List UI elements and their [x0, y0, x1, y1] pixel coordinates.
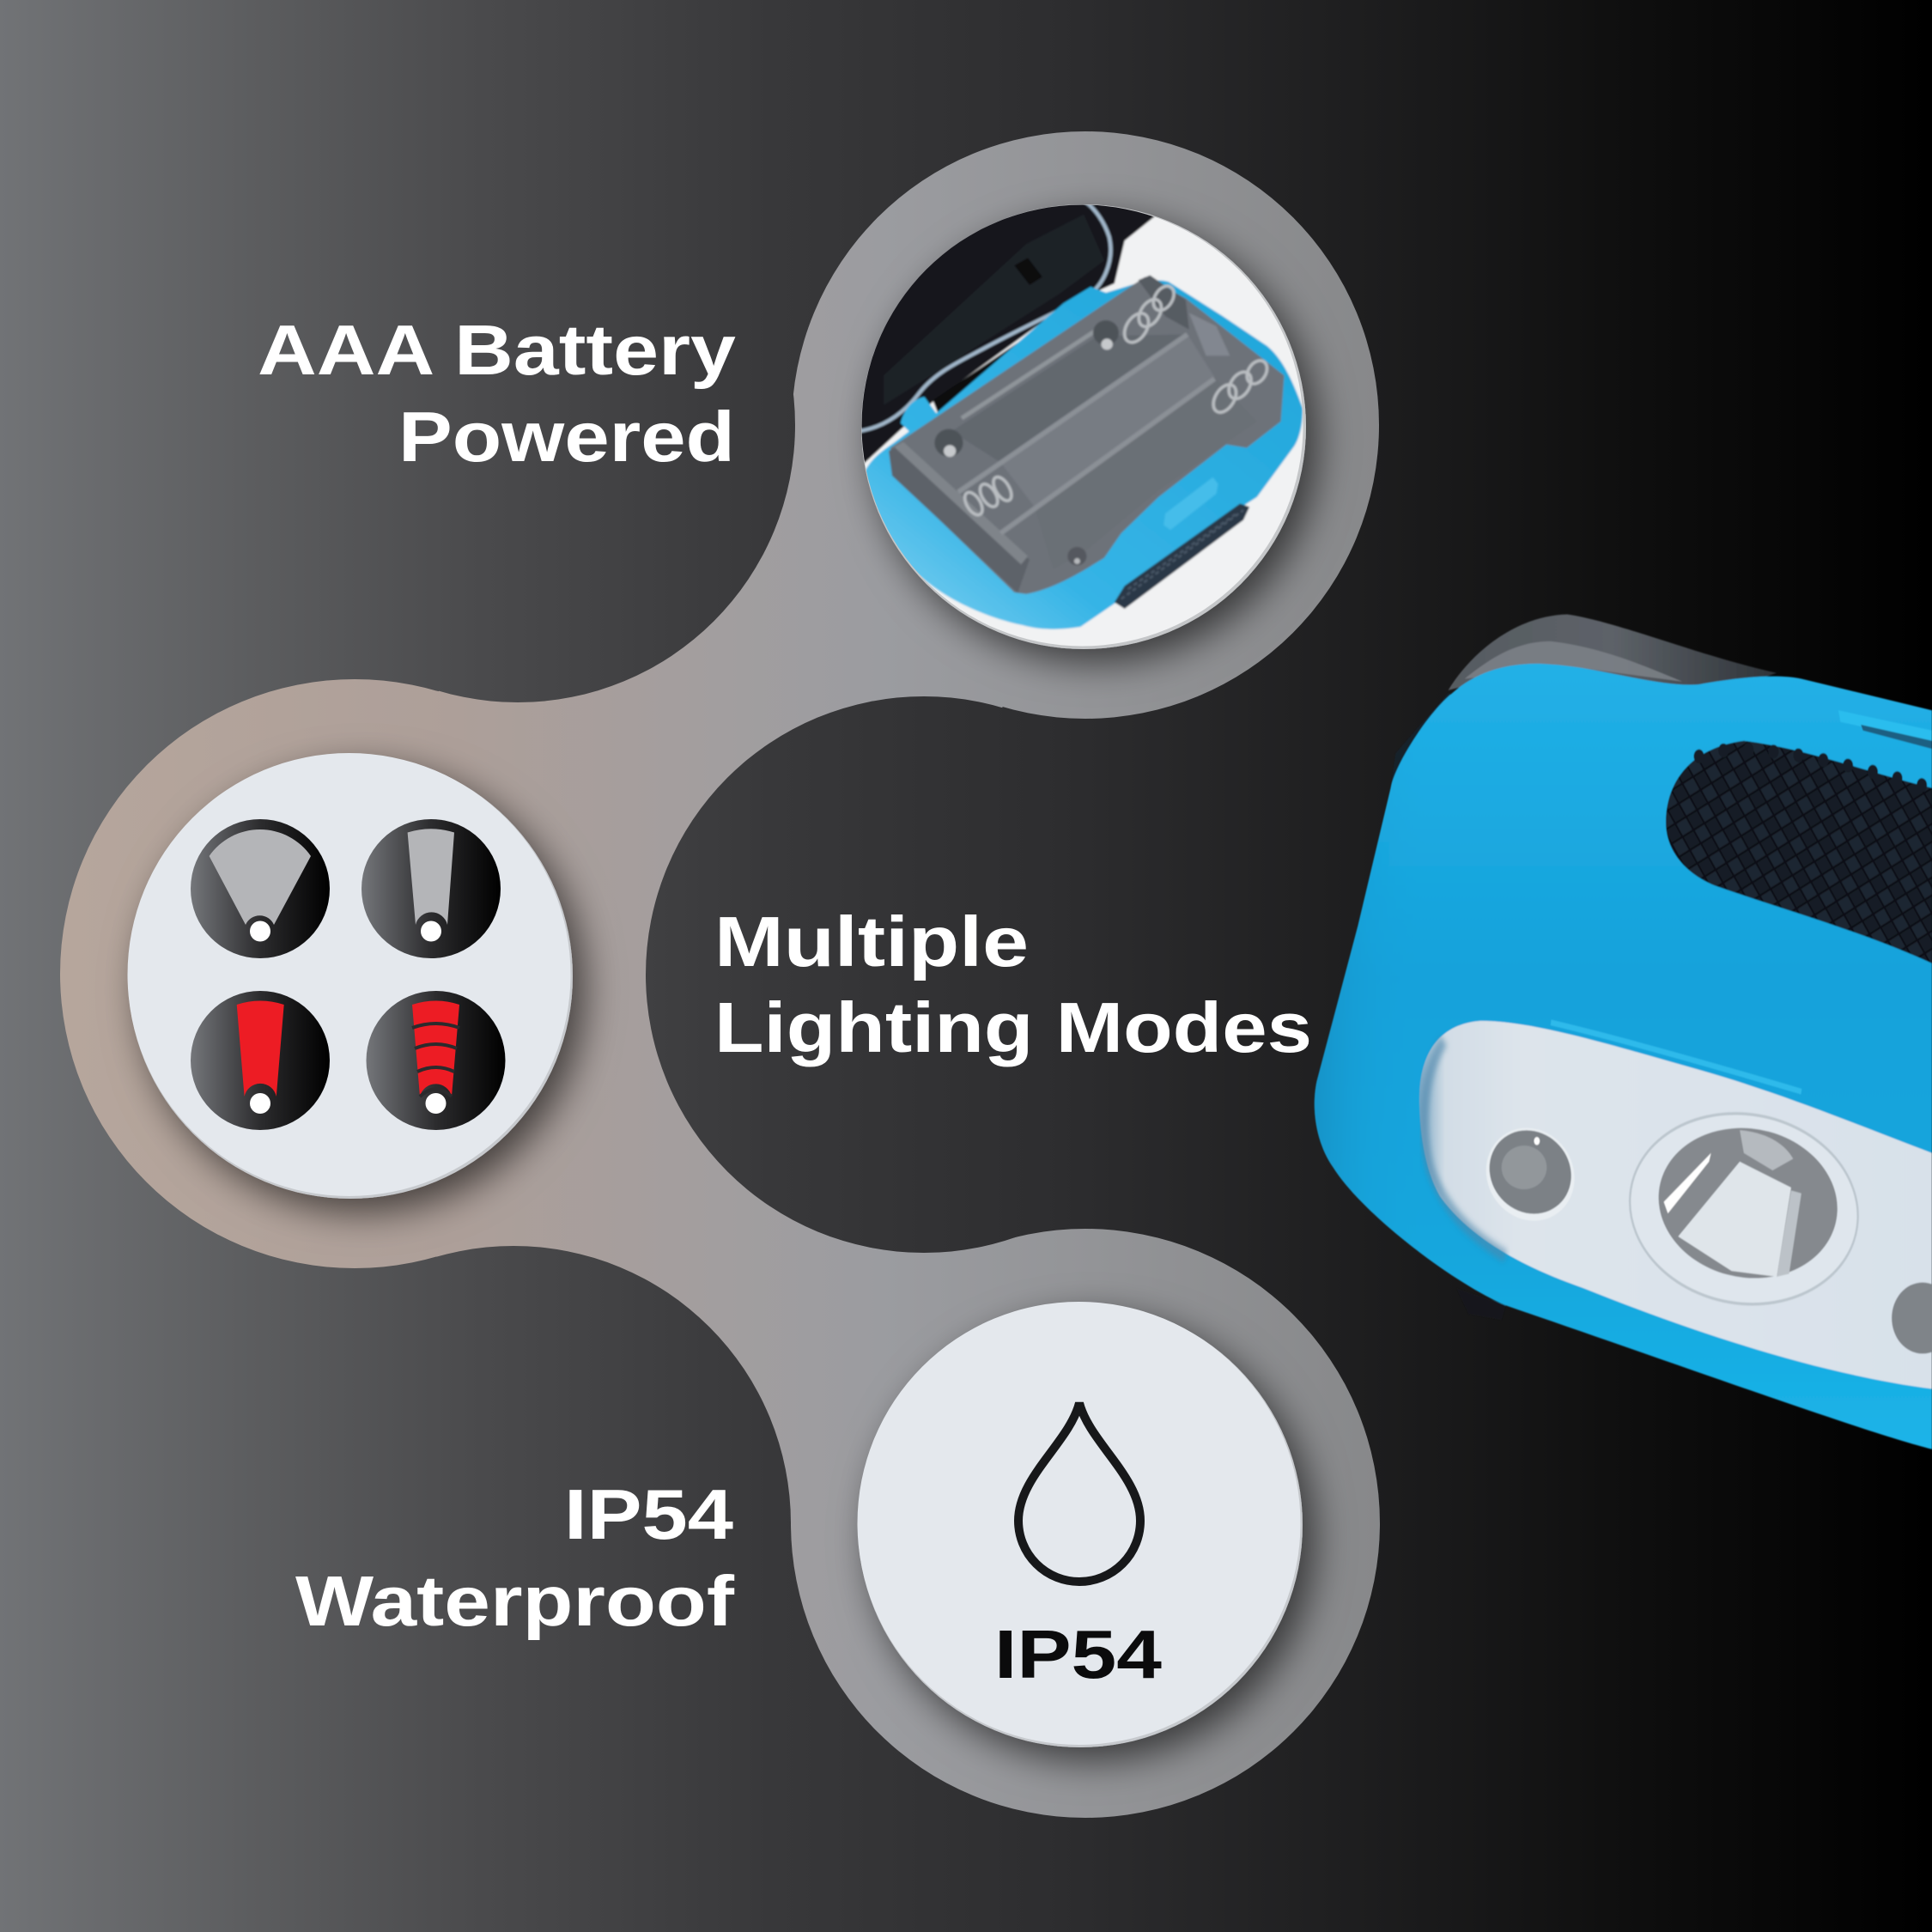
- heading: Multiple Lighting Modes: Multiple: [714, 902, 1029, 981]
- icon: red steady beam: [191, 991, 330, 1130]
- icon: red flashing beam: [366, 991, 505, 1130]
- heading: AAA Battery Powered: [258, 310, 736, 477]
- badge label: IP54: IP54: [994, 1616, 1163, 1692]
- panel: connected three-lobe shape: [60, 131, 1380, 1818]
- heading: AAA Battery Powered: AAA Battery: [258, 310, 736, 390]
- small LED right: [1892, 1283, 1932, 1354]
- photo: blue headlamp: [1315, 614, 1932, 1449]
- face plate: [1419, 1021, 1932, 1388]
- heading: IP54 Waterproof: [295, 1474, 734, 1641]
- heading: IP54 Waterproof: IP54: [564, 1474, 733, 1554]
- icon: wide white beam: [191, 819, 330, 958]
- heading: Multiple Lighting Modes: [714, 902, 1312, 1067]
- panel: IP54 waterproof circle: [857, 1302, 1303, 1747]
- rubber grip: [1666, 741, 1932, 963]
- heading: IP54 Waterproof: Waterproof: [295, 1561, 734, 1641]
- photo: open battery compartment: [862, 204, 1303, 646]
- heading: Multiple Lighting Modes: Lighting Modes: [714, 987, 1312, 1067]
- small LED left: [1482, 1121, 1579, 1229]
- panel: lighting modes circle: [127, 753, 573, 1199]
- blue ridge above face plate: [1551, 1023, 1801, 1091]
- icon: narrow white beam: [361, 819, 501, 958]
- heading: AAA Battery Powered: Powered: [398, 397, 735, 477]
- icon: water drop: [1018, 1403, 1140, 1582]
- main lens: [1625, 1103, 1862, 1315]
- panel: AAA battery circle: [850, 191, 1318, 658]
